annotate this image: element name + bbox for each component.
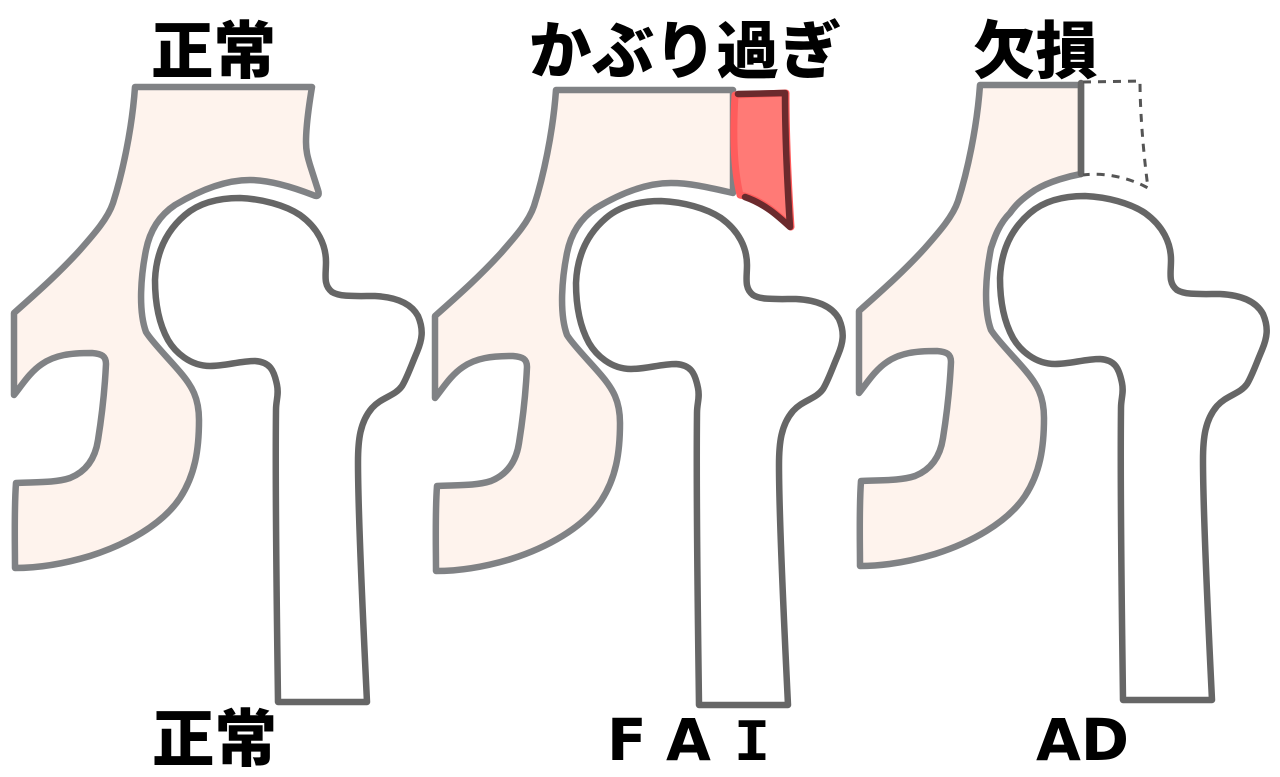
- label: FAI: A: [666, 706, 711, 774]
- pelvis: FAI: [435, 90, 733, 571]
- femur: FAI: [576, 201, 843, 705]
- label: AD: AD: [1036, 706, 1129, 774]
- panel: acetabular deficiency: [859, 17, 1267, 774]
- pelvis: AD: [859, 85, 1081, 566]
- label: FAI: F: [607, 706, 647, 774]
- title: over-coverage: かぶり過ぎ: [529, 17, 842, 87]
- panel: over-coverage, FAI: [435, 17, 843, 777]
- femur: normal: [155, 198, 422, 702]
- label: FAI: [607, 706, 770, 777]
- title: normal: 正常: [151, 17, 276, 87]
- femur: AD: [1000, 196, 1267, 700]
- title: deficiency: 欠損: [973, 17, 1098, 87]
- panel: normal hip: [14, 17, 422, 775]
- acetabular edge: [1078, 83, 1084, 174]
- pelvis: normal coverage: [14, 87, 319, 568]
- label: normal: 正常: [152, 705, 277, 775]
- label: FAI: I: [734, 711, 770, 777]
- highlight: excess acetabular overhang: [734, 93, 791, 227]
- outline: missing coverage: [1083, 81, 1148, 188]
